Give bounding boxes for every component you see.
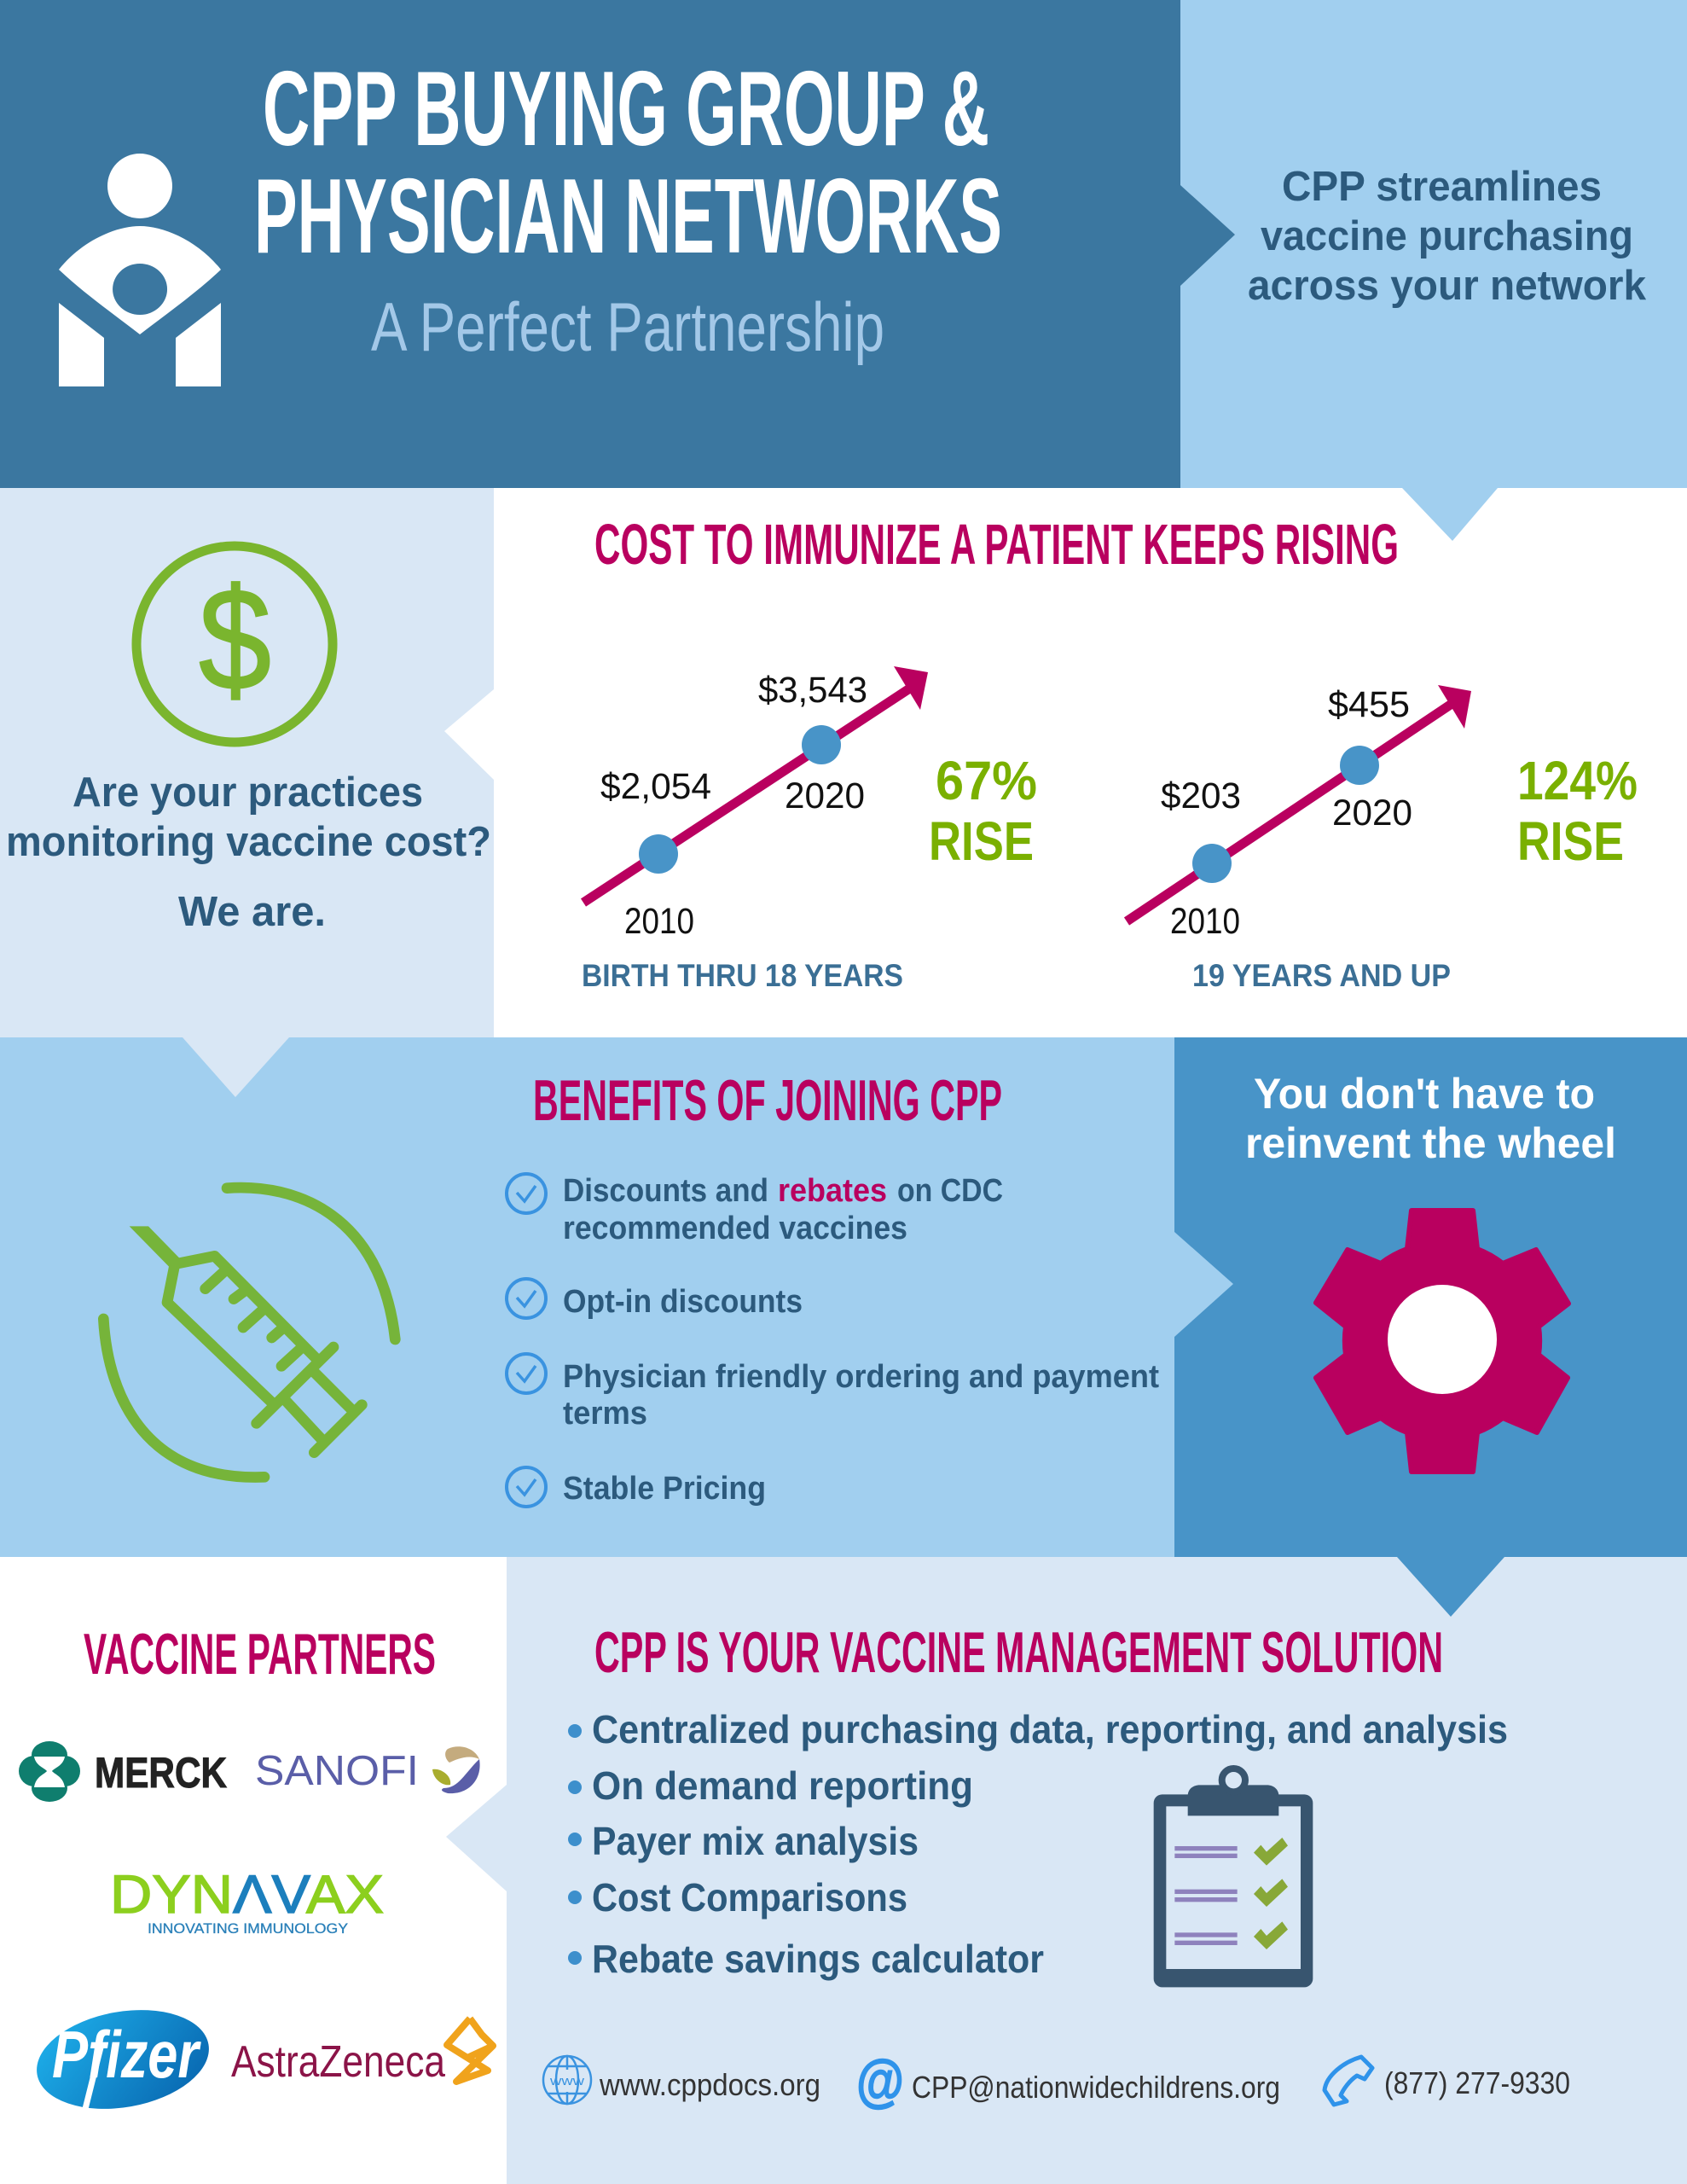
icon: dollar: [136, 546, 333, 742]
subtitle: A Perfect Partnership: [371, 289, 884, 366]
panel: rising cost: [444, 488, 1687, 1037]
benefit: opt-in discounts: Opt-in discounts: [563, 1284, 803, 1320]
list: solution features: On demand reporting: [592, 1763, 973, 1808]
text: monitoring question: We are.: [178, 889, 326, 935]
chart: birth thru 18: [582, 666, 928, 993]
benefit: discounts and rebates: recommended vaccines: [563, 1211, 907, 1246]
arrow: callout down: [1402, 488, 1498, 541]
chart: 19 and up: [1127, 684, 1471, 993]
benefit: ordering and payment: terms: [563, 1396, 647, 1432]
arrow: solution panel to partners: [446, 1785, 507, 1891]
callout text: across your network: [1248, 263, 1647, 309]
stat: 124% rise: [1517, 750, 1638, 872]
chart: birth thru 18: $2,054: [600, 766, 711, 807]
logo: Merck: MERCK: [95, 1749, 227, 1797]
contact: website: www.cppdocs.org: [599, 2067, 820, 2102]
arrow: wheel panel down: [1397, 1557, 1504, 1617]
callout text: CPP streamlines: [1282, 164, 1602, 210]
logo: Dynavax: INNOVATING IMMUNOLOGY: [148, 1920, 348, 1937]
contact: website: [543, 2056, 820, 2104]
stat: 124% rise: RISE: [1517, 810, 1624, 872]
arrow: benefits to wheel: [1174, 1232, 1233, 1337]
icon: gear: [1316, 1211, 1568, 1472]
contact: website: www: [549, 2074, 584, 2088]
list: solution features: Cost Comparisons: [592, 1875, 907, 1920]
title: CPP BUYING GROUP &: [263, 50, 989, 168]
chart: 19 and up: $203: [1161, 775, 1241, 816]
chart: 19 and up: 2010: [1170, 901, 1240, 942]
contact: phone: (877) 277-9330: [1384, 2065, 1570, 2100]
logo: AstraZeneca: [231, 2018, 493, 2087]
text: reinvent: You don't have to: [1254, 1070, 1595, 1118]
text: monitoring question: Are your practices: [72, 770, 423, 816]
heading: benefits: BENEFITS OF JOINING CPP: [533, 1068, 1002, 1133]
list: solution features: Payer mix analysis: [592, 1819, 919, 1863]
chart: 19 and up: 2020: [1332, 793, 1412, 834]
chart: birth thru 18: 2020: [785, 775, 865, 816]
chart: birth thru 18: 2010: [624, 901, 694, 942]
panel: reinvent the wheel: [1174, 1037, 1687, 1557]
callout text: [1248, 164, 1647, 309]
panel: vaccine management solution: [507, 1557, 1687, 2184]
stat: 67% rise: RISE: [929, 810, 1034, 872]
logo: Sanofi: SANOFI: [255, 1748, 419, 1794]
arrow: header to callout: [1180, 185, 1235, 286]
arrow: question panel down: [183, 1037, 289, 1097]
list: solution features: Rebate savings calculator: [592, 1937, 1044, 1981]
arrow: cost panel to question: [444, 689, 494, 780]
benefit: ordering and payment: Physician friendly ordering and payment: [563, 1359, 1159, 1395]
logo: Sanofi: [255, 1746, 480, 1794]
chart: birth thru 18: $3,543: [758, 670, 867, 711]
panel: header: [0, 0, 1180, 488]
panel: benefits: [0, 1037, 1175, 1557]
stat: 124% rise: 124%: [1517, 750, 1638, 811]
panel: cost monitoring: [0, 488, 494, 1037]
chart: 19 and up: $455: [1328, 684, 1410, 725]
icon: dollar: $: [199, 559, 271, 721]
stat: 67% rise: [929, 750, 1037, 872]
logo: AstraZeneca: AstraZeneca: [231, 2037, 445, 2087]
benefit: ordering and payment: [507, 1354, 1159, 1432]
benefit: discounts and rebates: on CDC: [897, 1173, 1003, 1209]
contact: email: [856, 2048, 1280, 2113]
title: [254, 50, 1002, 276]
stat: 67% rise: 67%: [936, 750, 1037, 811]
icon: syringe: [103, 1188, 395, 1478]
benefit: discounts and rebates: Discounts and: [563, 1173, 768, 1209]
heading: partners: VACCINE PARTNERS: [84, 1622, 436, 1687]
benefit: stable pricing: Stable Pricing: [563, 1471, 766, 1507]
logo: Pfizer: Pfizer: [52, 2017, 201, 2092]
contact: email: @: [856, 2048, 904, 2113]
contact: phone: [1325, 2057, 1570, 2105]
benefit: opt-in discounts: [507, 1279, 803, 1320]
text: monitoring question: [6, 770, 491, 935]
panel: vaccine partners: [0, 1557, 507, 2184]
logo: [59, 154, 221, 386]
icon: clipboard: [1154, 1769, 1313, 1987]
list: solution features: Centralized purchasing data, reporting, and analysis: [592, 1707, 1508, 1751]
title: PHYSICIAN NETWORKS: [254, 158, 1002, 276]
panel: streamlines callout: [1180, 0, 1687, 488]
text: reinvent: [1245, 1070, 1616, 1167]
callout text: vaccine purchasing: [1261, 213, 1633, 259]
benefit: stable pricing: [507, 1467, 766, 1507]
list: solution features: [568, 1707, 1508, 1981]
logo: Merck: [19, 1741, 227, 1802]
benefit: discounts and rebates: [507, 1173, 1003, 1246]
chart: 19 and up: 19 YEARS AND UP: [1192, 958, 1451, 993]
text: reinvent: reinvent the wheel: [1245, 1119, 1616, 1167]
text: monitoring question: monitoring vaccine cost?: [6, 819, 491, 865]
chart: birth thru 18: BIRTH THRU 18 YEARS: [582, 958, 903, 993]
logo: Dynavax: DYNΛVAX: [110, 1865, 384, 1925]
contact: email: CPP@nationwidechildrens.org: [912, 2070, 1280, 2105]
benefit: discounts and rebates: rebates: [778, 1173, 887, 1209]
logo: Pfizer: [29, 1997, 217, 2122]
